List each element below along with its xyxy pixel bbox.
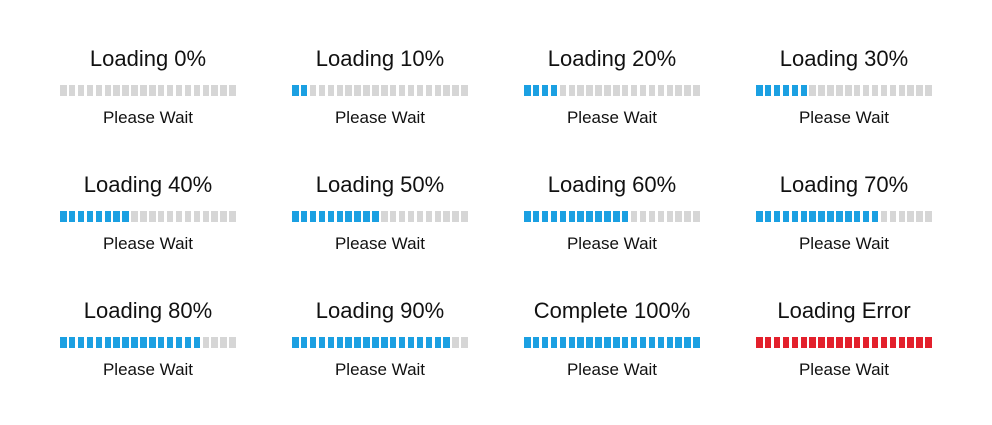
- cell: loading 0%: [60, 46, 236, 127]
- text: Please Wait: [335, 108, 425, 127]
- cell: loading 50%: [292, 172, 468, 253]
- cell: loading 90%: [292, 298, 468, 379]
- cell: loading 60%: [524, 172, 700, 253]
- cell: loading 30%: [756, 46, 932, 127]
- bar 80%: [60, 337, 236, 348]
- text: Please Wait: [103, 108, 193, 127]
- cell: complete 100%: [524, 298, 700, 379]
- bar 0%: [60, 85, 236, 96]
- text: Loading 0%: [90, 46, 206, 71]
- cell: loading 40%: [60, 172, 236, 253]
- cell: loading 80%: [60, 298, 236, 379]
- bar 30%: [756, 85, 932, 96]
- text: Loading 30%: [780, 46, 908, 71]
- bar 100%: [524, 337, 700, 348]
- text: Please Wait: [567, 234, 657, 253]
- cell: loading error: [756, 298, 932, 379]
- text: Loading 50%: [316, 172, 444, 197]
- text: Complete 100%: [534, 298, 690, 323]
- bar 50%: [292, 211, 468, 222]
- bar 90%: [292, 337, 468, 348]
- bar error: [756, 337, 932, 348]
- cell: loading 20%: [524, 46, 700, 127]
- bar 60%: [524, 211, 700, 222]
- text: Please Wait: [335, 234, 425, 253]
- text: Loading 10%: [316, 46, 444, 71]
- text: Loading 20%: [548, 46, 676, 71]
- bar 20%: [524, 85, 700, 96]
- cell: loading 70%: [756, 172, 932, 253]
- text: Loading Error: [777, 298, 911, 323]
- cell: loading 10%: [292, 46, 468, 127]
- text: Loading 60%: [548, 172, 676, 197]
- text: Please Wait: [103, 360, 193, 379]
- bar 70%: [756, 211, 932, 222]
- text: Loading 70%: [780, 172, 908, 197]
- text: Loading 40%: [84, 172, 212, 197]
- text: Please Wait: [799, 234, 889, 253]
- bar 10%: [292, 85, 468, 96]
- text: Loading 80%: [84, 298, 212, 323]
- bar 40%: [60, 211, 236, 222]
- text: Please Wait: [335, 360, 425, 379]
- text: Please Wait: [567, 360, 657, 379]
- text: Please Wait: [103, 234, 193, 253]
- text: Please Wait: [799, 360, 889, 379]
- text: Please Wait: [567, 108, 657, 127]
- text: Loading 90%: [316, 298, 444, 323]
- text: Please Wait: [799, 108, 889, 127]
